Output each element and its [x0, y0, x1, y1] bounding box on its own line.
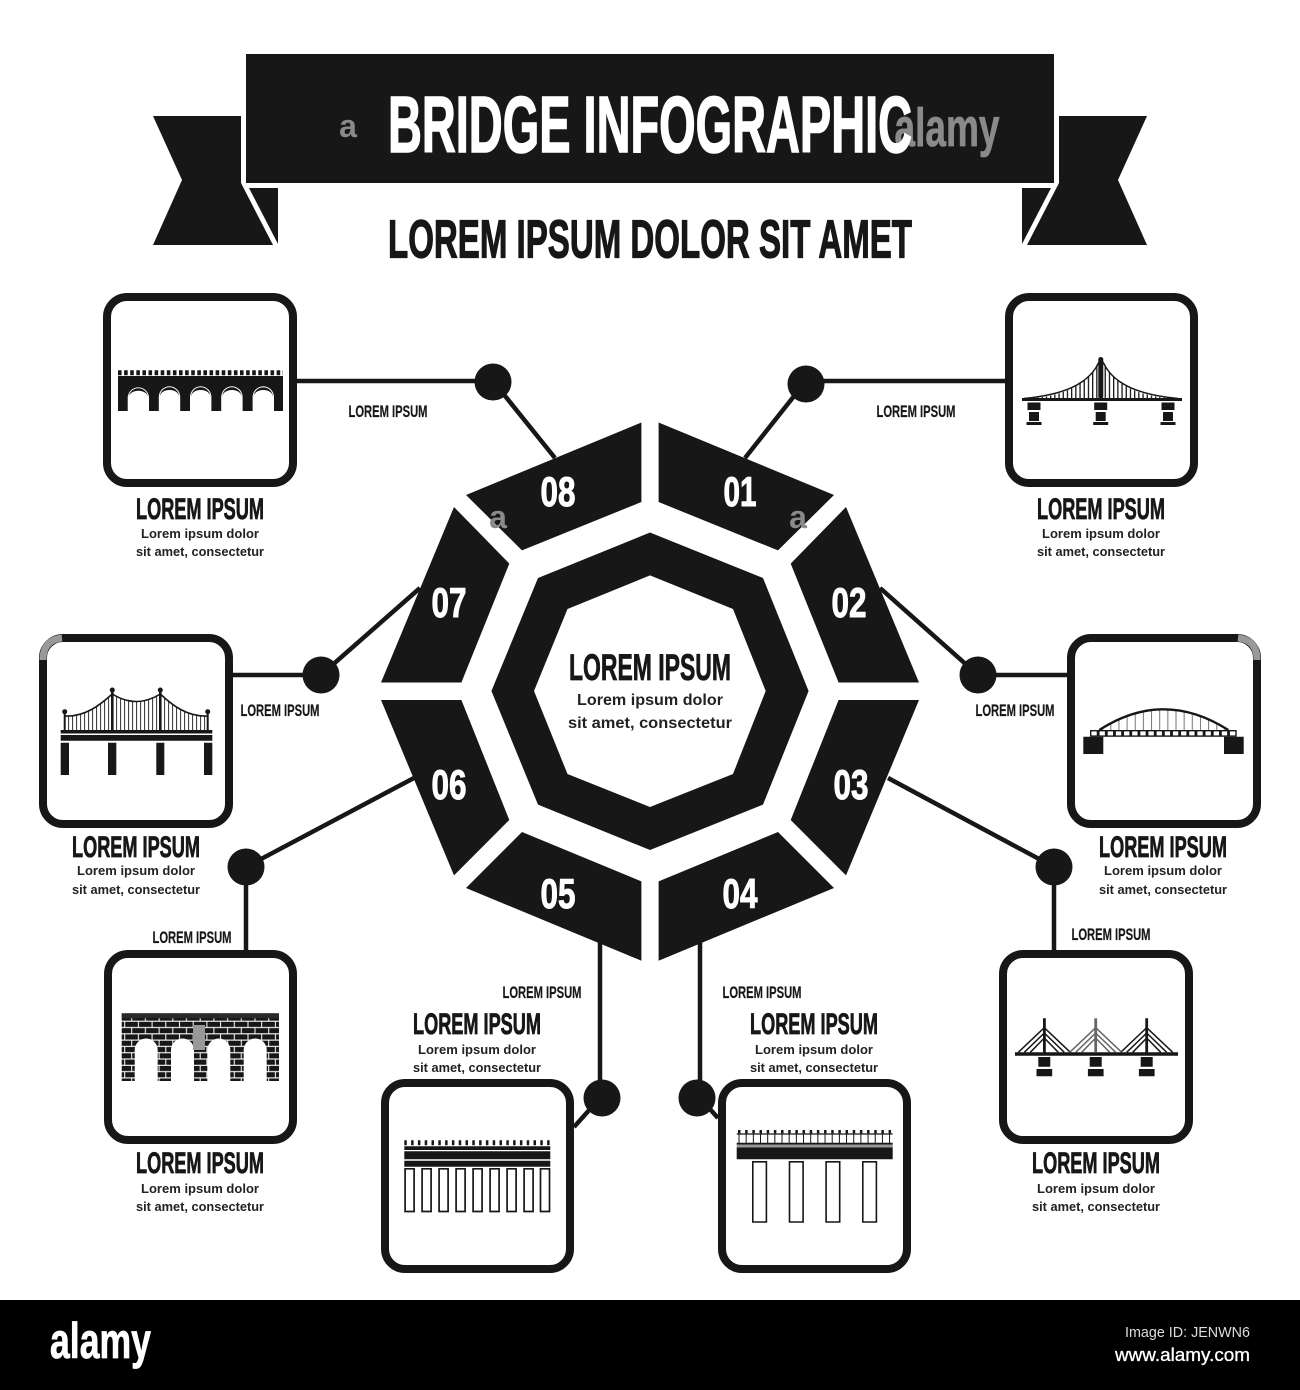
panel: lower left brick viaduct	[108, 954, 293, 1214]
heading and text: LOREM IPSUM	[136, 493, 264, 526]
heading and text	[136, 1147, 264, 1214]
segment 03: 03	[834, 761, 868, 808]
segment 04	[659, 832, 834, 961]
heading and text: sit amet, consectetur	[136, 544, 264, 559]
ribbon tail right	[1027, 116, 1147, 245]
heading and text: LOREM IPSUM	[750, 1008, 878, 1041]
segment 05: 05	[540, 870, 576, 917]
segment 06: 06	[432, 761, 466, 808]
watermark letters on segments	[489, 499, 807, 535]
panel: top right suspension bridge	[1009, 297, 1194, 559]
segment 06	[381, 700, 509, 875]
heading and text: LOREM IPSUM	[136, 1147, 264, 1180]
watermark corner	[43, 638, 62, 660]
heading and text	[1032, 1147, 1160, 1214]
heading and text: Lorem ipsum dolor	[755, 1042, 873, 1057]
segment 07	[381, 507, 509, 682]
segment 04: 04	[722, 870, 758, 917]
panel: middle right tied arch bridge	[1071, 638, 1257, 897]
connector labels: LOREM IPSUM	[976, 702, 1054, 720]
segment 02	[791, 507, 919, 682]
watermark letters on segments: a	[789, 499, 807, 535]
ribbon tail left	[153, 116, 273, 245]
footer logo: alamy	[50, 1313, 151, 1369]
heading and text: LOREM IPSUM	[1037, 493, 1165, 526]
image id: Image ID: JENWN6	[1125, 1324, 1250, 1341]
connector labels: LOREM IPSUM	[1072, 926, 1150, 944]
panel: middle left twin tower suspension bridge	[43, 638, 229, 897]
connector labels: LOREM IPSUM	[240, 702, 320, 720]
website: www.alamy.com	[1114, 1345, 1250, 1365]
centre text: LOREM IPSUM	[569, 647, 731, 688]
heading and text: Lorem ipsum dolor	[1037, 1181, 1155, 1196]
heading and text: sit amet, consectetur	[1037, 544, 1165, 559]
connector labels: LOREM IPSUM	[722, 984, 802, 1002]
icon: tied arch bridge	[1083, 709, 1244, 754]
icon: stone arch bridge	[118, 373, 283, 411]
heading and text: sit amet, consectetur	[1099, 882, 1227, 897]
watermark letters on segments: a	[489, 499, 507, 535]
watermark in banner	[339, 98, 1000, 158]
watermark corner	[1238, 638, 1257, 660]
inner octagon ring	[491, 532, 809, 850]
heading and text: LOREM IPSUM	[1032, 1147, 1160, 1180]
watermark in banner: alamy	[894, 98, 1000, 158]
icon: railed column bridge	[737, 1132, 893, 1222]
connector labels: LOREM IPSUM	[348, 403, 428, 421]
segment 08: 08	[540, 468, 576, 515]
heading and text	[136, 493, 264, 559]
centre text: sit amet, consectetur	[568, 715, 732, 732]
heading and text: LOREM IPSUM	[413, 1008, 541, 1041]
title text: BRIDGE INFOGRAPHIC	[388, 80, 912, 169]
heading and text	[1037, 493, 1165, 559]
ribbon fold right	[1022, 188, 1051, 244]
centre text: Lorem ipsum dolor	[577, 692, 723, 709]
icon: many column bridge	[404, 1143, 550, 1212]
heading and text: Lorem ipsum dolor	[1104, 863, 1222, 878]
footer bar	[0, 1300, 1300, 1390]
segment 07: 07	[432, 579, 466, 626]
panel: lower right cable stayed bridge	[1003, 954, 1189, 1214]
icon: twin tower suspension bridge	[61, 688, 212, 775]
heading and text: sit amet, consectetur	[750, 1060, 878, 1075]
heading and text: sit amet, consectetur	[1032, 1199, 1160, 1214]
heading and text: sit amet, consectetur	[72, 882, 200, 897]
heading and text: sit amet, consectetur	[136, 1199, 264, 1214]
centre text	[568, 647, 732, 732]
panel: top left stone arch bridge	[107, 297, 293, 559]
heading and text: Lorem ipsum dolor	[141, 526, 259, 541]
heading and text: Lorem ipsum dolor	[418, 1042, 536, 1057]
title banner	[153, 54, 1147, 245]
heading and text: Lorem ipsum dolor	[77, 863, 195, 878]
segment 01: 01	[724, 468, 756, 515]
heading and text	[750, 1008, 878, 1075]
segment 01	[659, 422, 834, 550]
watermark in banner: a	[339, 108, 357, 144]
connector labels	[152, 403, 1150, 1002]
icon: cable stayed bridge	[1015, 1018, 1178, 1076]
segment 02: 02	[832, 579, 866, 626]
connector lines and nodes	[228, 364, 1072, 1127]
heading and text: sit amet, consectetur	[413, 1060, 541, 1075]
heading and text: Lorem ipsum dolor	[141, 1181, 259, 1196]
icon: suspension bridge	[1022, 357, 1182, 425]
connector labels: LOREM IPSUM	[152, 929, 232, 947]
heading and text	[72, 831, 200, 897]
segment 08	[466, 422, 641, 550]
segment 05	[466, 832, 641, 961]
heading and text: LOREM IPSUM	[72, 831, 200, 864]
connector labels: LOREM IPSUM	[502, 984, 582, 1002]
heading and text: Lorem ipsum dolor	[1042, 526, 1160, 541]
heading and text	[1099, 831, 1227, 897]
ribbon fold left	[249, 188, 278, 244]
subtitle: LOREM IPSUM DOLOR SIT AMET	[388, 210, 912, 270]
icon: brick viaduct	[122, 1013, 279, 1082]
connector labels: LOREM IPSUM	[876, 403, 956, 421]
segment 03	[791, 700, 919, 875]
panel: bottom right railed column bridge	[722, 1008, 907, 1269]
panel: bottom left many column bridge	[385, 1008, 570, 1269]
central octagon diagram	[381, 422, 919, 961]
heading and text	[413, 1008, 541, 1075]
